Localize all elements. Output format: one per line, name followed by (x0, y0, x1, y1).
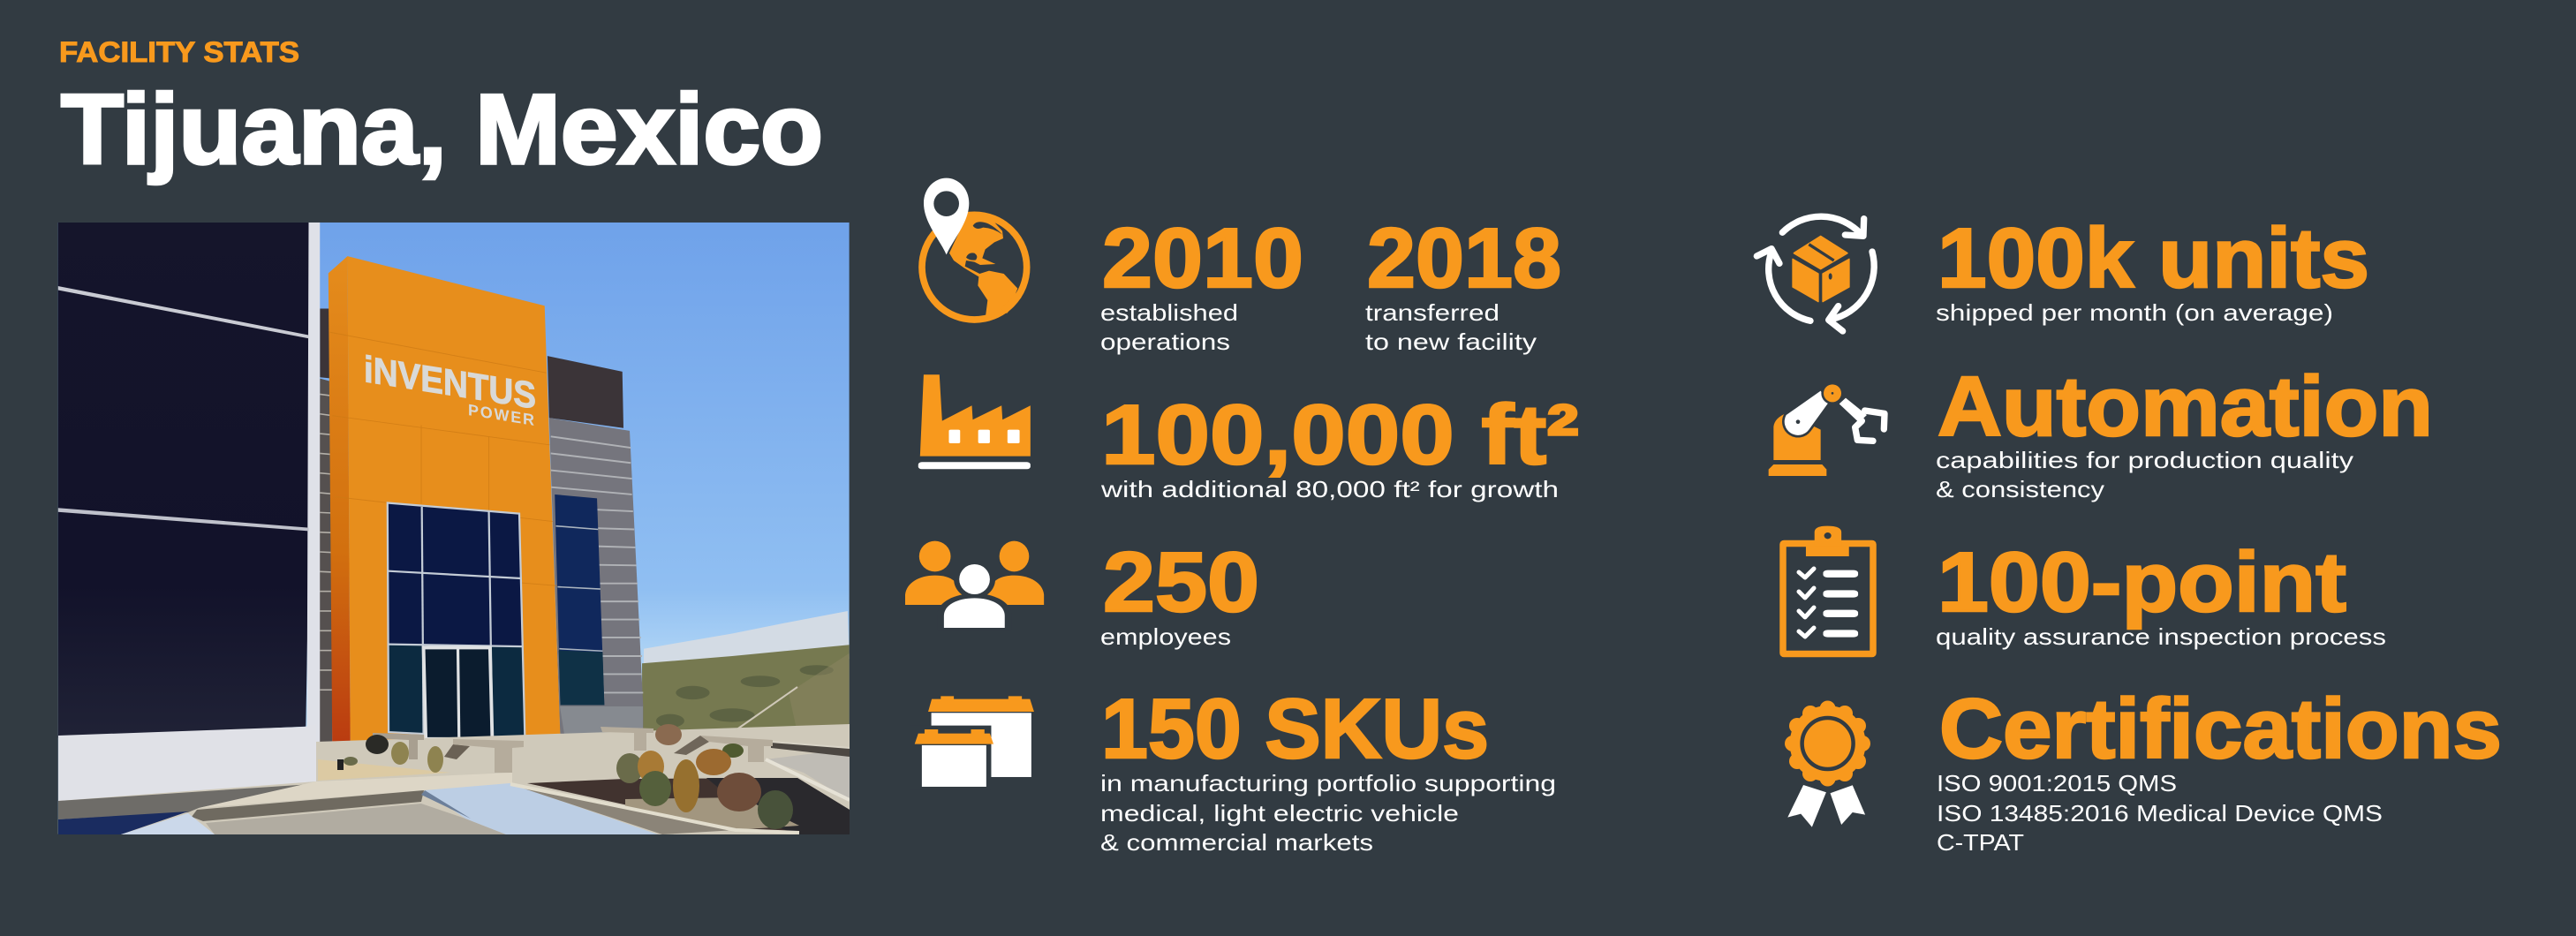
text: portfolio description: & commercial markets (1100, 829, 1373, 856)
text: certification list: C-TPAT (1937, 829, 2024, 856)
heading: 150 SKUs: 150 SKUs (1101, 682, 1489, 776)
text: capabilities: & consistency (1936, 476, 2104, 502)
heading: 2010: 2010 (1102, 211, 1303, 306)
text: quality assurance: quality assurance inspection process (1936, 623, 2386, 650)
text: established operations: operations (1100, 328, 1230, 355)
icon: clipboard checklist (1783, 526, 1873, 653)
text: employees: employees (1100, 623, 1231, 650)
text: capabilities (1936, 447, 2353, 502)
stat: floor area (918, 374, 1579, 502)
logo lettering on building: iNVENTUS (364, 348, 536, 417)
stat: SKUs (910, 682, 1556, 856)
text: portfolio description (1100, 770, 1556, 856)
text: certification list: ISO 9001:2015 QMS (1937, 770, 2177, 796)
text: capabilities: capabilities for production quality (1936, 447, 2353, 473)
text: transferred to new facility: transferred (1365, 299, 1500, 326)
heading: 100,000 ft²: 100,000 ft² (1101, 388, 1579, 482)
text: established operations (1100, 299, 1238, 355)
text: certification list: ISO 13485:2016 Medical Device QMS (1937, 800, 2383, 827)
stat: certifications (1785, 682, 2502, 856)
stat: units shipped (1756, 211, 2369, 331)
stat: founding years (922, 178, 1561, 355)
stat: automation (1769, 359, 2433, 502)
heading: 100k units: 100k units (1938, 211, 2369, 306)
icon: factory (918, 374, 1031, 469)
text: additional space: with additional 80,000 ft² for growth (1100, 476, 1559, 502)
icon: batteries (910, 696, 1034, 790)
icon: globe with location pin (922, 178, 1027, 320)
text: established operations: established (1100, 299, 1238, 326)
text: transferred to new facility (1365, 299, 1537, 355)
text: shipped per month: shipped per month (on average) (1936, 299, 2333, 326)
eyebrow: facility stats: FACILITY STATS (59, 36, 299, 68)
heading: 100-point: 100-point (1938, 535, 2346, 630)
heading: 250: 250 (1103, 535, 1259, 630)
benches (373, 727, 773, 773)
heading: Automation: Automation (1938, 359, 2433, 454)
photo: Inventus Power facility exterior (58, 223, 850, 834)
heading: Certifications: Certifications (1939, 682, 2502, 776)
text: portfolio description: in manufacturing portfolio supporting (1100, 770, 1556, 796)
stat: quality inspection (1783, 526, 2386, 653)
plants (337, 724, 793, 829)
icon: people (905, 541, 1044, 630)
text: transferred to new facility: to new facility (1365, 328, 1537, 355)
heading: 2018: 2018 (1367, 211, 1561, 306)
text: portfolio description: medical, light electric vehicle (1100, 800, 1459, 827)
title: Tijuana, Mexico (61, 74, 823, 185)
icon: package with cycle arrows (1756, 216, 1874, 331)
text: certification list (1937, 770, 2383, 856)
icon: award ribbon (1785, 701, 1870, 827)
stat: employees (905, 535, 1259, 650)
icon: robotic arm (1769, 382, 1885, 476)
logo lettering on building: POWER (468, 401, 534, 429)
